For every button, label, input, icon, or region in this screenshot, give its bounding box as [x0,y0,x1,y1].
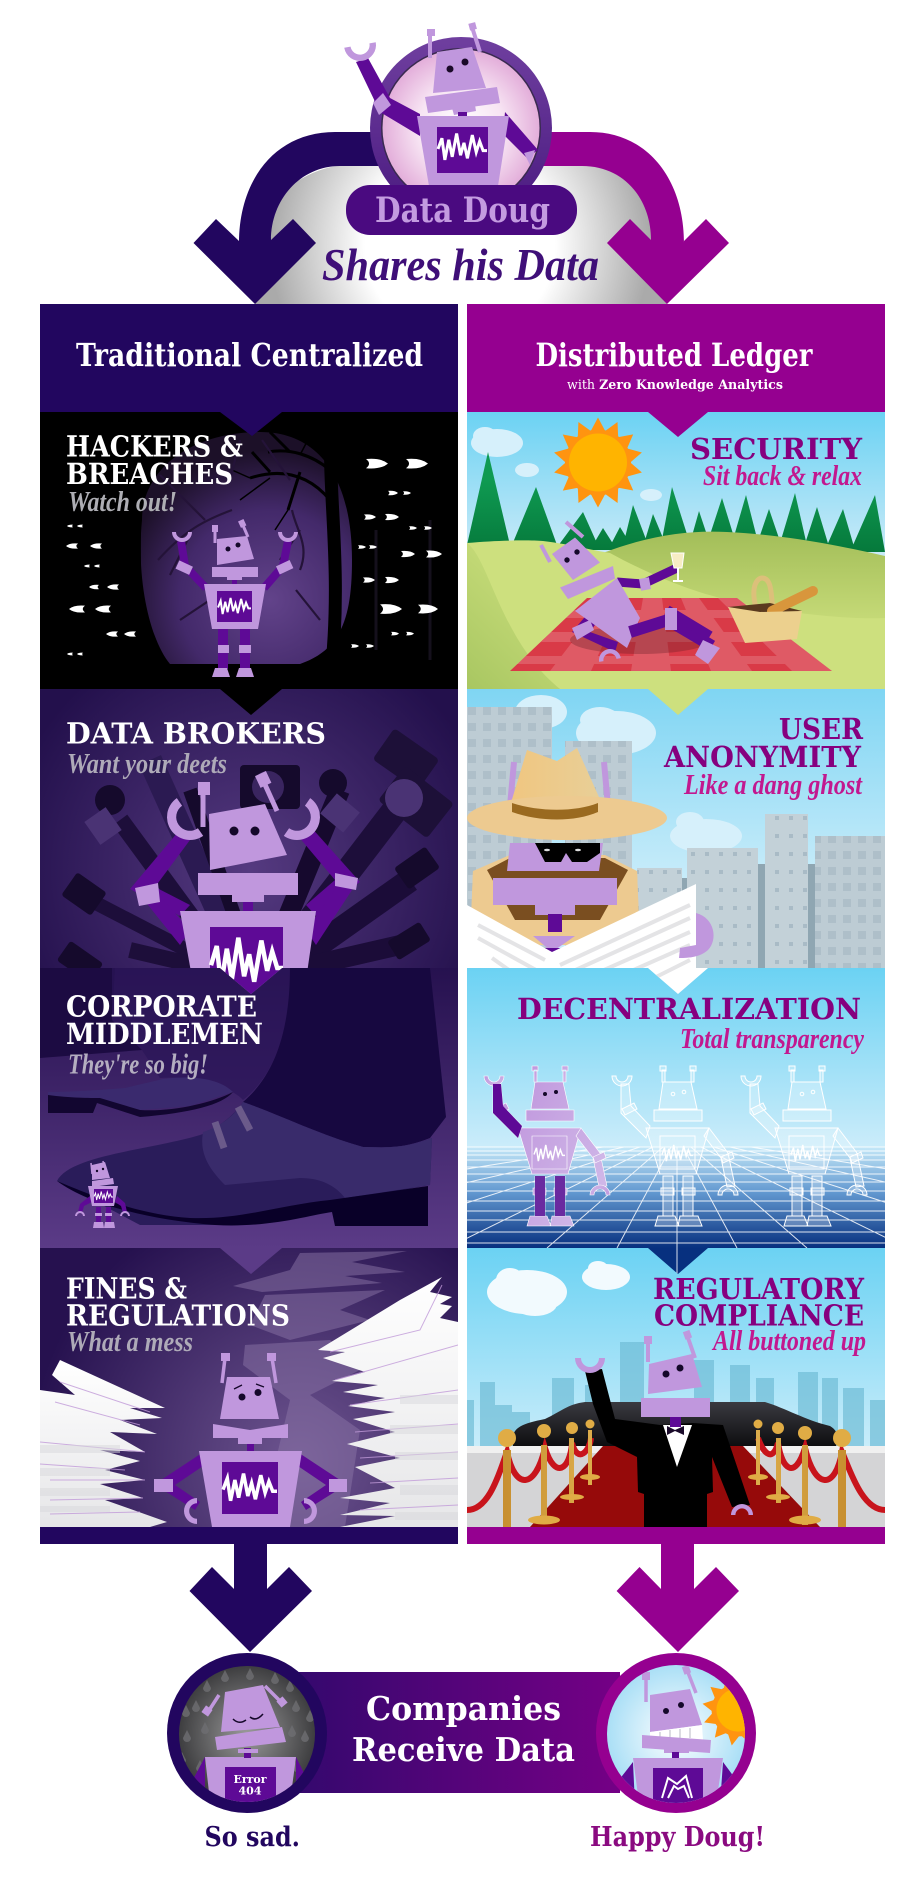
red carpet [530,1446,820,1527]
arrow: to traditional centralized [194,132,400,304]
footer bar left [40,1527,458,1544]
emblem: sad Doug [167,1653,327,1813]
robot: Doug in disguise [467,748,667,956]
city skyline [467,1342,885,1446]
panel: fines and regulations [40,1248,458,1527]
heading: regulatory compliance: REGULATORY [653,1272,864,1306]
heading: regulatory compliance: COMPLIANCE [654,1298,864,1332]
heading: user anonymity: USER [779,712,864,746]
caption: so sad: So sad. [204,1822,300,1853]
city buildings [467,707,885,968]
fan of arms with phones, cameras and microphones [90,760,410,970]
caption: happy doug: Happy Doug! [590,1822,765,1853]
panel: decentralization [467,968,885,1274]
background paper stack [233,1251,407,1527]
raindrops [178,1668,314,1772]
robot: overwhelmed Doug [130,771,360,997]
heading: user anonymity [663,712,864,801]
heading: decentralization: DECENTRALIZATION [517,992,861,1026]
robot: transparent Doug, second node [612,1066,738,1226]
eyes watching from the dark [66,459,442,655]
robot: worried Doug [154,1353,347,1527]
robot: relaxing Doug [541,522,720,664]
limousine [512,1402,838,1446]
hand holding newspaper [679,913,714,958]
panel: data brokers [40,689,458,997]
sun [552,418,644,508]
large shoe [57,1102,432,1226]
stanchions and ropes [467,1420,885,1527]
column header: traditional centralized: Traditional Centralized [76,336,423,374]
robot: colored Doug [484,1066,610,1226]
top arc backdrop [255,164,667,304]
road [467,1446,885,1527]
arrow: left to companies [190,1544,312,1652]
heading: corporate middlemen: MIDDLEMEN [66,1017,263,1051]
grid floor [467,1146,885,1274]
newspaper [467,884,708,994]
panel: hackers and breaches [40,412,458,715]
robot: scared Doug arms up [172,519,298,677]
left paper stack [40,1360,167,1527]
panel: user anonymity [467,689,885,994]
robot: Doug in a tuxedo [575,1330,753,1527]
heading: fines and regulations: FINES & [66,1272,187,1306]
pill: Data Doug: Data Doug [375,190,550,231]
heading: corporate middlemen: They're so big! [68,1049,208,1081]
heading: fines and regulations [67,1277,288,1352]
heading: regulatory compliance: All buttoned up [711,1325,866,1357]
panel: regulatory compliance [467,1248,885,1527]
column header: distributed ledger [467,304,885,437]
panel: security [467,412,885,715]
heading: security: SECURITY [690,432,862,466]
band: companies receive data: Receive Data [352,1730,575,1769]
footer bar right [467,1527,885,1544]
column header: distributed ledger: Distributed Ledger [536,336,813,374]
band: companies receive data [290,1672,620,1793]
heading: data brokers [67,722,324,779]
heading: security: Sit back & relax [703,460,862,492]
heading: hackers and breaches [67,435,243,512]
emblem: sad Doug: Error [233,1773,267,1786]
heading: hackers and breaches: BREACHES [66,457,233,491]
clouds [515,695,742,853]
heading: data brokers: DATA BROKERS [66,717,326,751]
clouds [487,1261,630,1316]
picnic blanket [510,598,832,671]
dark forest glow [141,432,352,664]
fists, cameras and gadgets [57,728,454,983]
upper leg and shoe [40,968,290,1117]
column header: traditional centralized [40,304,458,436]
heading: security [690,432,862,492]
heading: hackers and breaches: HACKERS & [66,429,243,463]
heading: corporate middlemen: CORPORATE [66,990,257,1024]
heading: decentralization [518,998,864,1054]
clouds [471,427,662,501]
column header: distributed ledger: with Zero Knowledge Analytics [567,378,783,393]
arrow: right to companies [617,1544,739,1652]
emblem: happy Doug [596,1653,764,1813]
heading: fines and regulations: What a mess [67,1326,193,1358]
panel: corporate middlemen [40,968,458,1274]
heading: fines and regulations: REGULATIONS [66,1298,290,1332]
rolling hills [467,532,885,715]
heading: user anonymity: Like a dang ghost [683,769,863,801]
heading: hackers and breaches: Watch out! [68,486,177,518]
robot: transparent Doug, third node [741,1066,867,1226]
robot: tiny Doug under shoe [75,1161,130,1228]
emblem: Data Doug circle and robot [344,22,552,219]
heading: regulatory compliance [653,1272,866,1357]
band: companies receive data: Companies [366,1689,561,1728]
small sun [701,1674,764,1747]
subtitle: Shares his Data: Shares his Data [322,239,599,290]
large trouser leg [243,968,446,1147]
arrow: to distributed ledger [520,132,729,304]
heading: decentralization: Total transparency [680,1023,864,1055]
pine trees [467,452,885,552]
forest silhouettes [134,420,430,665]
heading: data brokers: Want your deets [67,748,227,780]
picnic basket and baguette [728,578,813,643]
emblem: sad Doug: 404 [239,1784,262,1798]
heading: user anonymity: ANONYMITY [663,740,861,774]
right paper stack [318,1277,458,1527]
heading: corporate middlemen [66,990,263,1081]
